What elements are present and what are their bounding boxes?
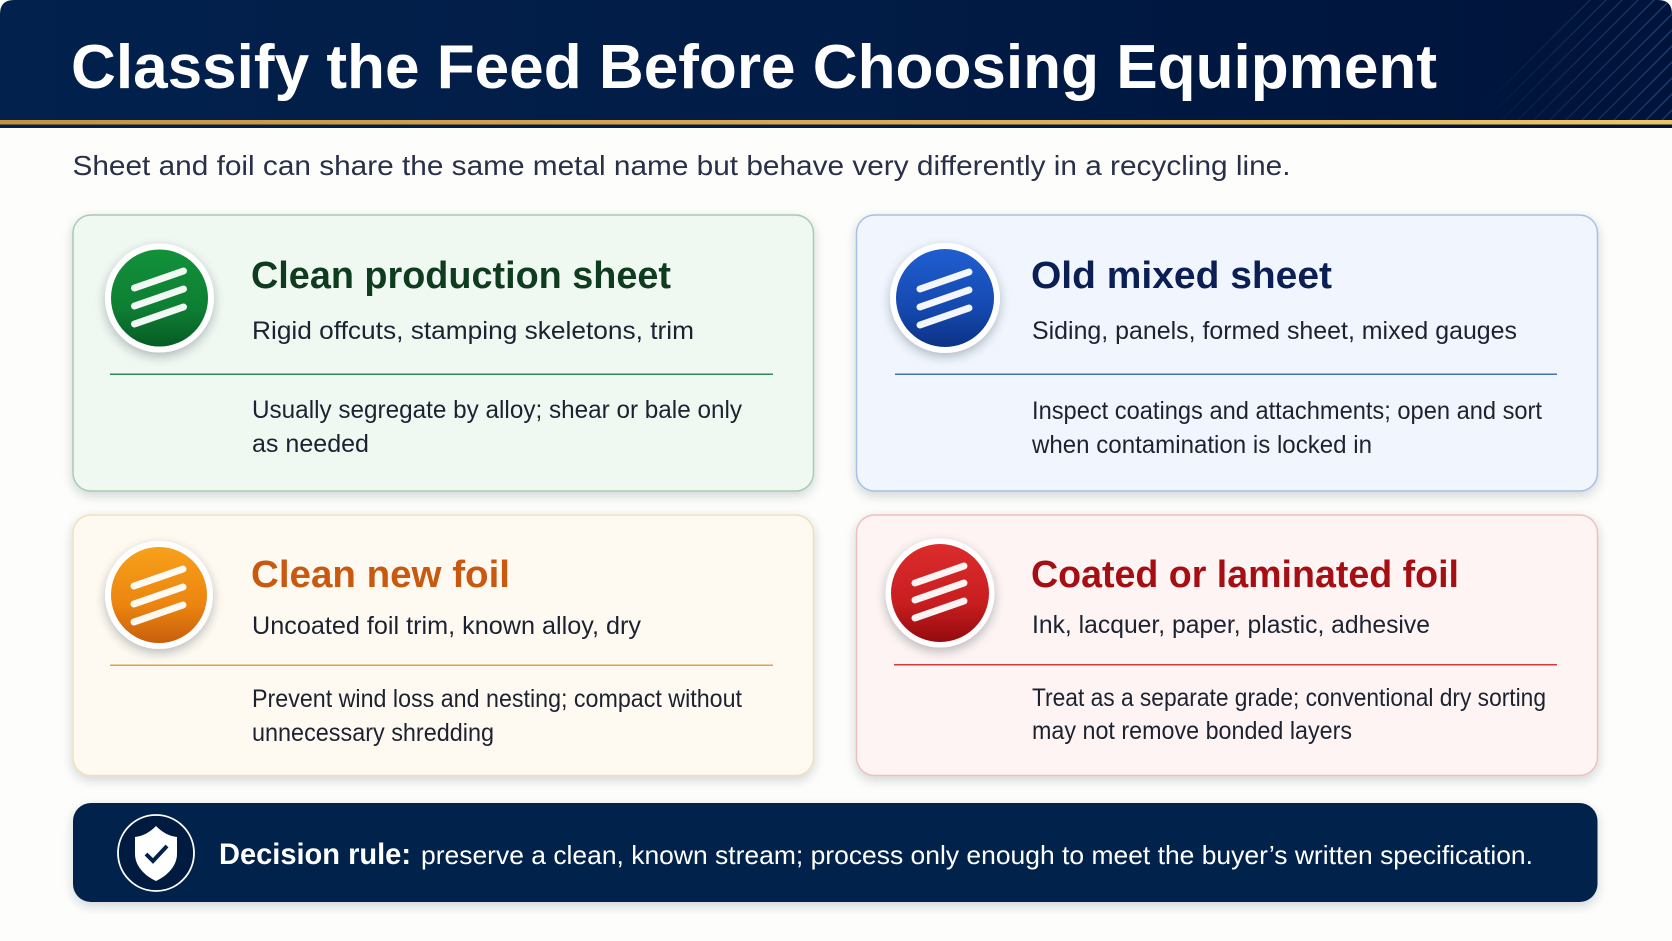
header band — [0, 0, 1672, 128]
guidance: Usually segregate by alloy; shear or bale only — [252, 396, 742, 424]
divider — [895, 374, 1557, 375]
guidance: as needed — [252, 430, 369, 458]
panel: clean new foil — [73, 515, 814, 776]
icon: orange foil stack — [105, 541, 213, 649]
guidance: unnecessary shredding — [252, 719, 494, 747]
decision rule text: preserve a clean, known stream; process only enough to meet the buyer’s written specification. — [421, 840, 1533, 870]
icon: green sheet stack — [105, 244, 214, 352]
panel: old mixed sheet — [856, 215, 1598, 491]
decision rule text: Decision rule: — [219, 838, 411, 871]
icon: blue sheet stack — [890, 243, 1000, 353]
feed description: Siding, panels, formed sheet, mixed gauges — [1032, 317, 1517, 345]
heading: Clean production sheet — [251, 255, 671, 297]
divider — [110, 664, 773, 666]
subtitle: Sheet and foil can share the same metal name but behave very differently in a recycling line. — [72, 150, 1290, 181]
decision rule banner — [73, 803, 1598, 902]
panel: clean production sheet — [73, 215, 814, 491]
feed description: Ink, lacquer, paper, plastic, adhesive — [1032, 611, 1430, 639]
heading: Coated or laminated foil — [1031, 554, 1459, 596]
feed description: Uncoated foil trim, known alloy, dry — [252, 612, 641, 640]
guidance: Prevent wind loss and nesting; compact without — [252, 685, 742, 713]
icon: red foil stack — [886, 538, 994, 648]
divider — [894, 664, 1557, 666]
heading: Old mixed sheet — [1031, 255, 1332, 297]
title: Classify the Feed Before Choosing Equipment — [71, 33, 1437, 102]
guidance: may not remove bonded layers — [1032, 717, 1352, 745]
icon: shield with check — [118, 815, 194, 891]
panel: coated or laminated foil — [856, 515, 1598, 776]
feed description: Rigid offcuts, stamping skeletons, trim — [252, 317, 694, 345]
guidance: Inspect coatings and attachments; open and sort — [1032, 397, 1542, 425]
heading: Clean new foil — [251, 554, 510, 596]
guidance: Treat as a separate grade; conventional dry sorting — [1032, 684, 1546, 712]
guidance: when contamination is locked in — [1031, 431, 1372, 459]
divider — [110, 374, 773, 375]
